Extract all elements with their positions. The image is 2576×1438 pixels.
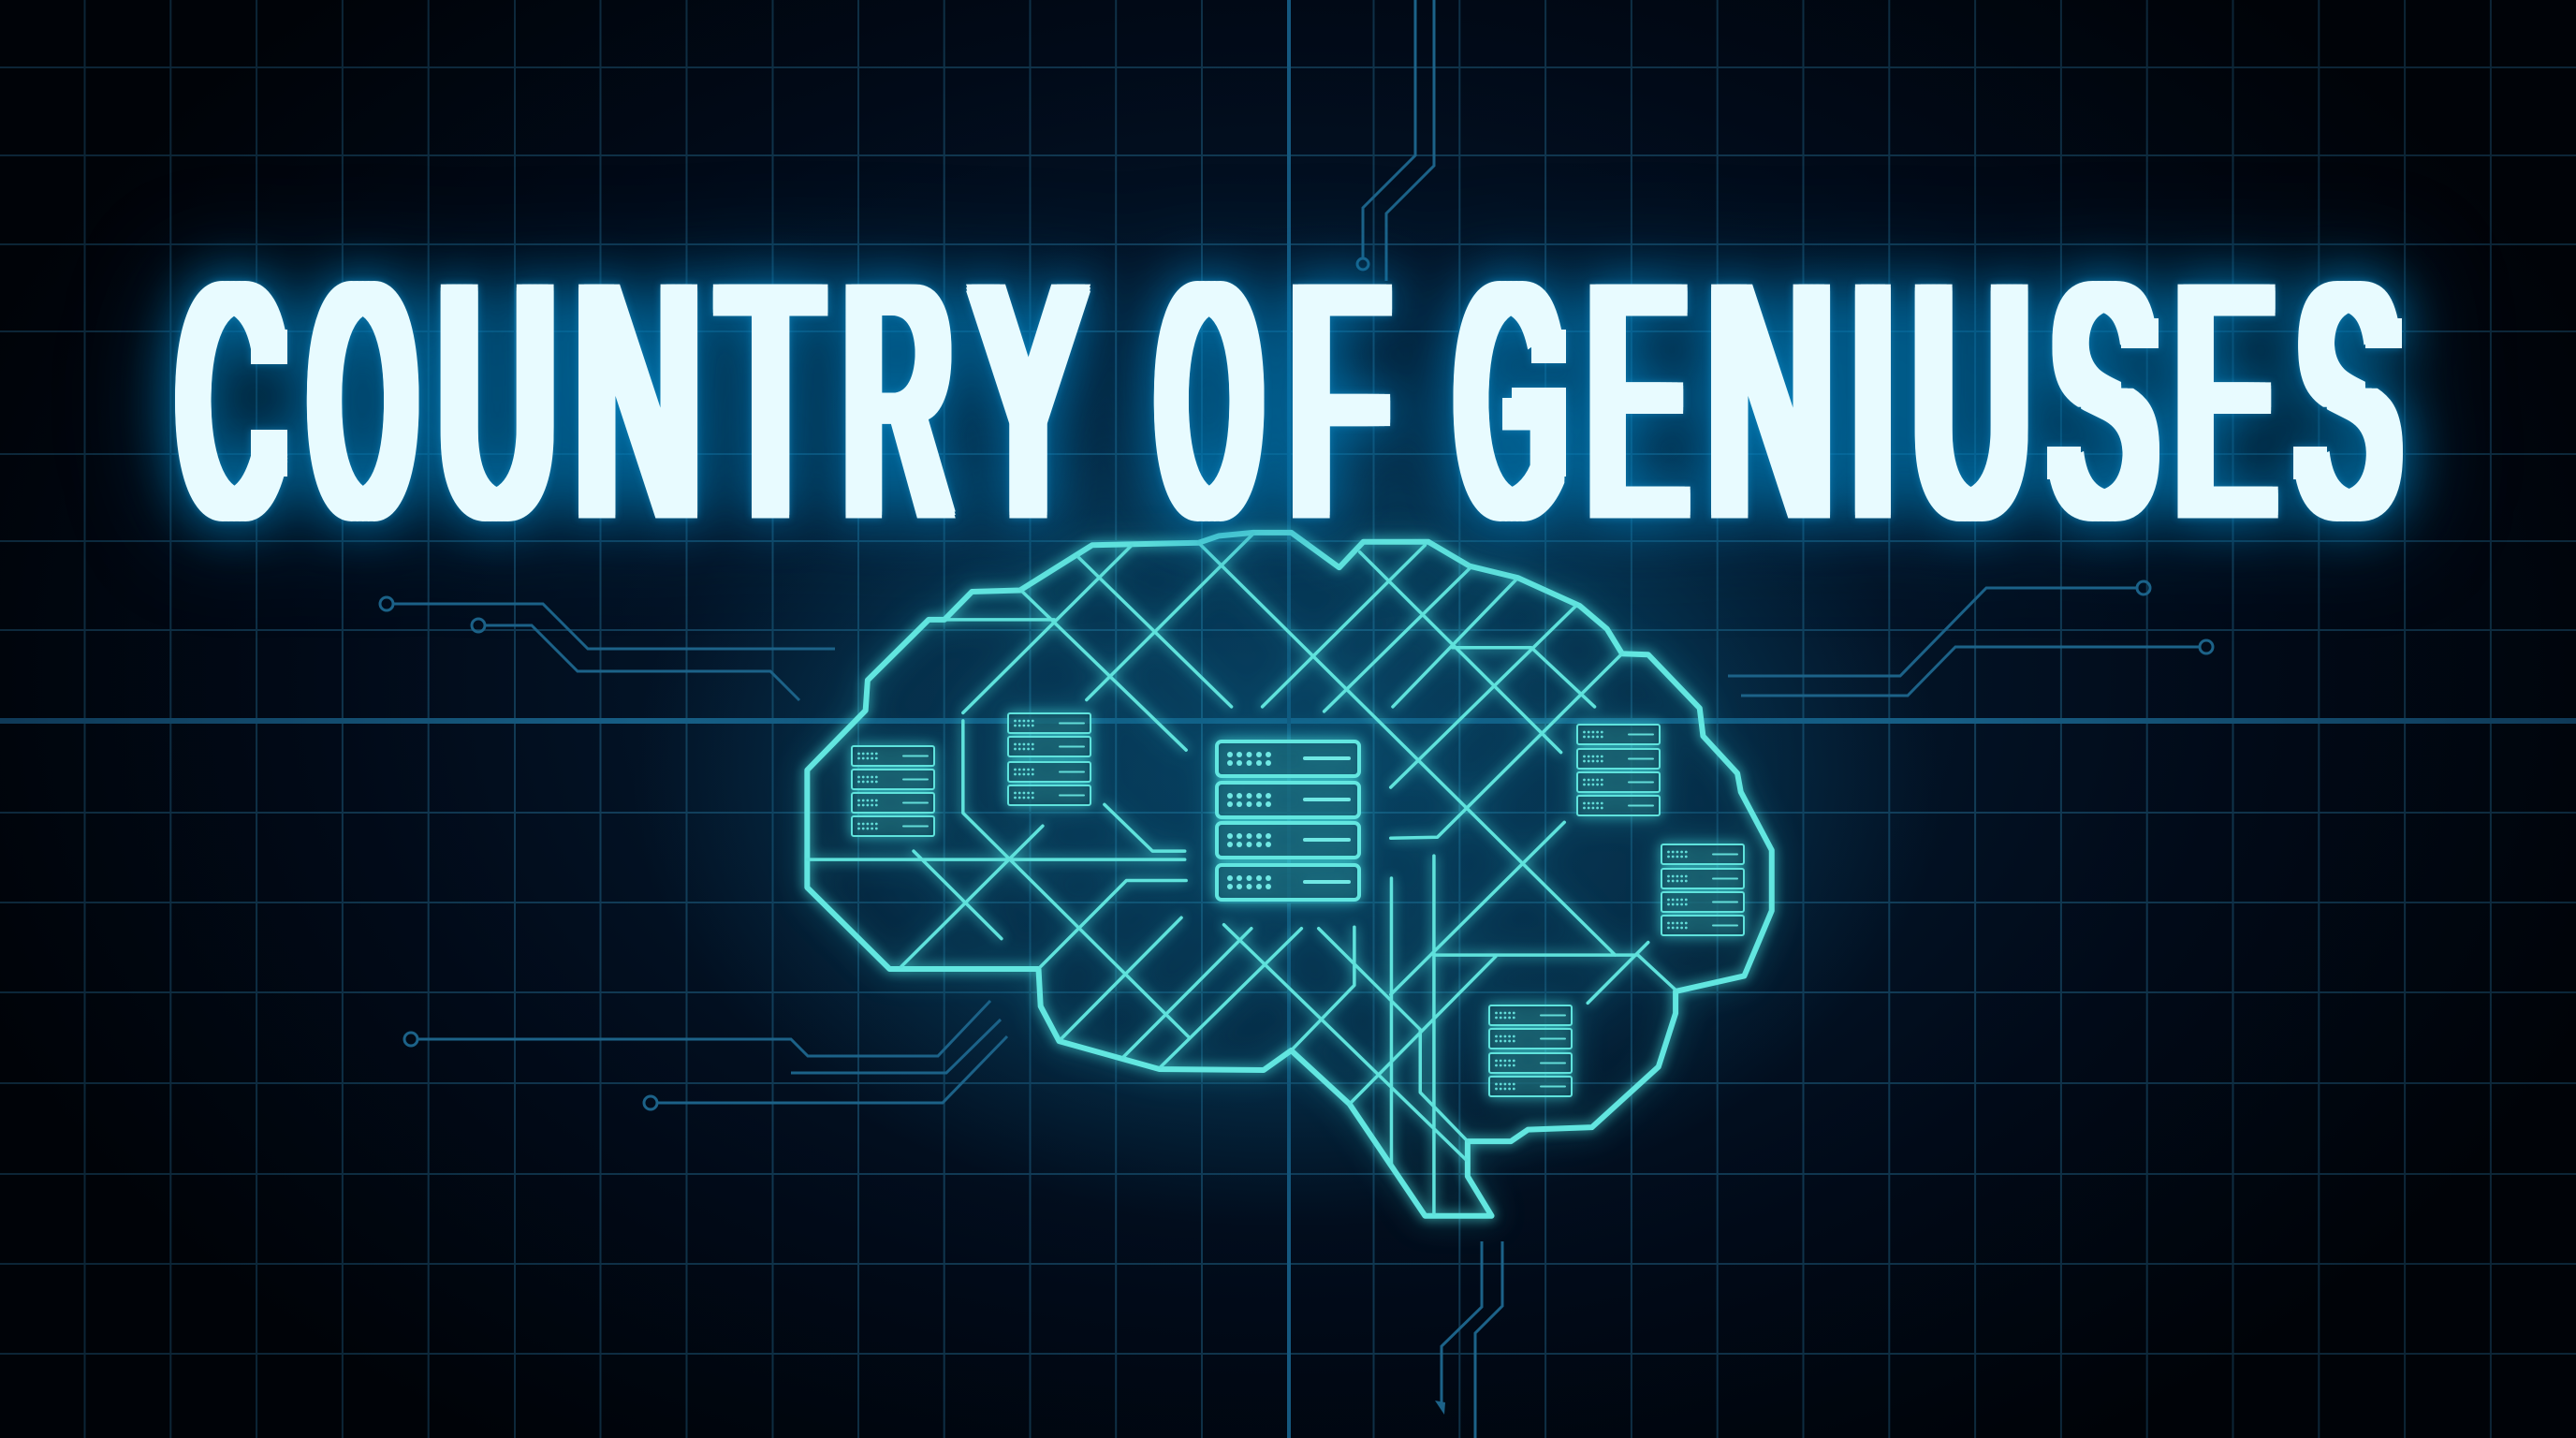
server rack: far left [852,746,934,836]
circuit traces: upper right [1728,581,2213,696]
circuit traces: bottom centre with arrow [1435,1241,1502,1438]
title: U [1914,215,2029,585]
server rack: upper left [1008,713,1090,805]
title: N [576,215,700,585]
title: G [1457,215,1563,585]
brain backdrop glow [633,328,1943,1226]
circuit traces: lower left [404,1001,1007,1109]
circuit traces: top centre [1357,0,1434,281]
server rack: lower right [1489,1005,1572,1096]
server rack: upper right [1577,725,1660,815]
brain outline and interior traces [807,533,1772,1216]
title: S [2052,215,2156,585]
title: T [721,215,820,585]
title: U [440,215,555,585]
circuit traces: upper left [380,597,835,700]
title: E [1589,215,1685,585]
title: N [1708,215,1833,585]
title: F [1291,215,1387,585]
server rack: central [1217,741,1359,900]
title [118,215,2455,585]
title: S [2298,215,2398,585]
title: I [1853,215,1893,585]
title: O [312,215,414,585]
title: Y [973,215,1083,585]
title: R [845,215,951,585]
title: E [2177,215,2273,585]
server rack: far right [1661,844,1744,935]
title: O [1159,215,1259,585]
title: C [179,215,282,585]
brain network illustration [807,533,1772,1216]
